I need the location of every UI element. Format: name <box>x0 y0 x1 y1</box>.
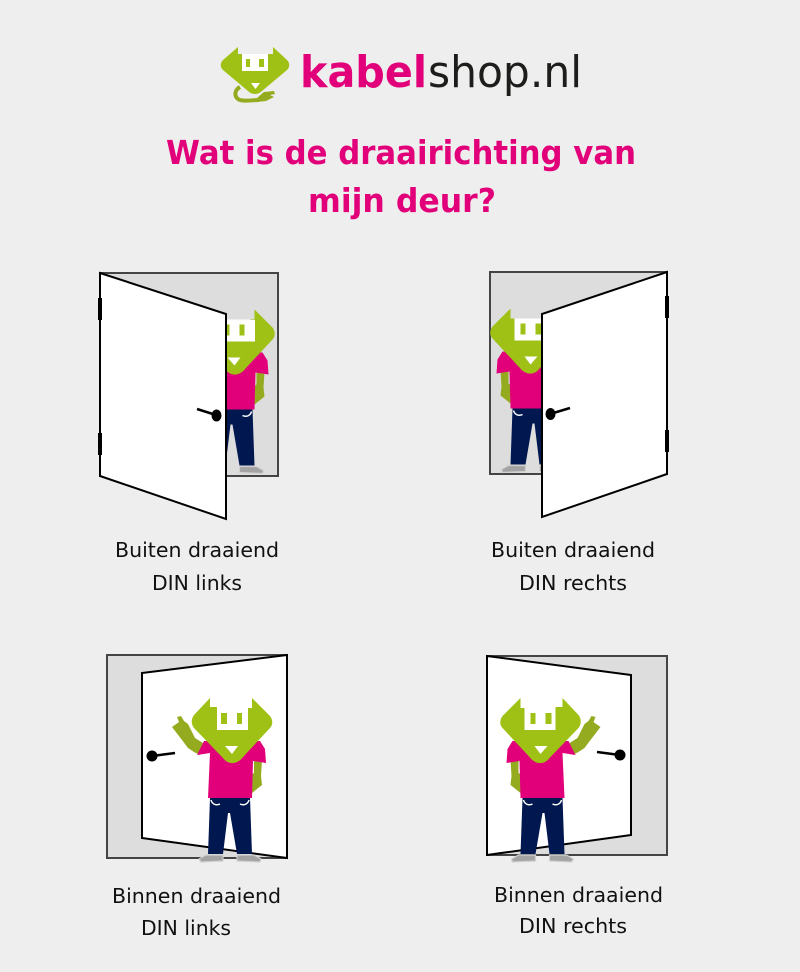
label <box>112 884 281 940</box>
mascot <box>172 698 272 862</box>
label: DIN links <box>152 571 242 595</box>
label: Binnen draaiend <box>112 884 281 908</box>
panel: buiten draaiend DIN links <box>100 273 279 595</box>
label <box>115 538 279 595</box>
panel: binnen draaiend DIN links <box>107 655 287 940</box>
label <box>491 538 655 595</box>
open door <box>142 655 287 858</box>
door handle <box>146 750 175 762</box>
mascot <box>174 310 275 474</box>
hinges <box>98 298 102 455</box>
door frame <box>490 272 667 474</box>
label: Binnen draaiend <box>494 883 663 907</box>
panel: binnen draaiend DIN rechts <box>487 656 667 938</box>
label <box>494 883 663 938</box>
open door <box>100 273 226 519</box>
logo wordmark <box>300 47 582 98</box>
label: Buiten draaiend <box>115 538 279 562</box>
mascot <box>500 698 600 862</box>
title: mijn deur? <box>308 181 496 220</box>
door handle <box>597 750 626 760</box>
door handle <box>546 408 570 420</box>
door frame <box>107 655 287 858</box>
logo <box>221 47 582 102</box>
open door <box>487 656 631 855</box>
hinges <box>665 296 669 452</box>
label: DIN rechts <box>519 914 627 938</box>
door handle <box>197 409 222 422</box>
icon: logo plug mascot <box>221 47 289 102</box>
panel: buiten draaiend DIN rechts <box>490 272 667 595</box>
title: Wat is de draairichting van <box>166 133 636 172</box>
label: Buiten draaiend <box>491 538 655 562</box>
open door <box>542 272 667 517</box>
label: DIN links <box>141 916 231 940</box>
logo wordmark: shop.nl <box>428 47 582 98</box>
mascot <box>490 308 590 472</box>
door frame <box>487 656 667 855</box>
door frame <box>100 273 278 476</box>
logo wordmark: kabel <box>300 47 427 98</box>
label: DIN rechts <box>519 571 627 595</box>
